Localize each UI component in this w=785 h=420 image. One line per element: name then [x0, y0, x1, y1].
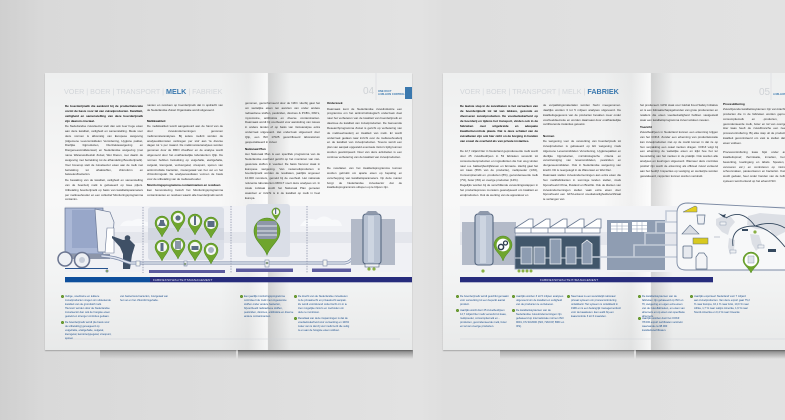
bullet: fabriek 2: Jaarlijks wordt door 25 zuivelbedrijven 12,7 miljard liter melk verwerkt tot kaas, melkpoeder, consumptiemelk en -producten, gecondenseerde melk, boter en tal van overige producten. — [460, 309, 507, 328]
text: Monitoringsprogramma: Een bemonstering betreft het Monitoringsprogramma contaminanten en residuen waarin alle boerderijmelk wordt — [147, 188, 223, 197]
text: Toezicht: Zuivelbedrijven in Nederland kunnen een erkenning krijgen van het COKZ. Zonder een erkenning van productielocatie kan zuivelproducten niet op de markt komen in dat ze op hun verpakking een ovaal merken dragen. COKZ volgt bij een erkenning de wettelijke eisen en kijkt hoe het ter beoordeling van het merken in de praktijk. Ook worden alle analyses en keuringen uitgevoerd. Wanneer deze controles positief zijn wordt de erkenning als officieel zuivel verleend aan het bedrijf. Inspecties op vestiging en werkwijze worden geëvalueerd, rapporten kunnen worden verstrekt. — [640, 130, 718, 178]
header marks: rules and blue tab — [376, 73, 771, 100]
text: column three top: genomen, geconformeerd door de NZO. Hierbij gaat het om wettelijke eisen ten aanzien van onder andere radioactieve stoffen, pesticiden, dioxines & PCB's, PAK's, mycotoxine, antibiotica en diverse contaminanten. Daarnaast wordt bij voorbeeld voor aansluiting van issues in andere landen of op basis van risicoanalyse extra onderzoek uitgevoerd. Het onderzoek uitgevoerd door Qlip, een ISO 17025 gecertificeerd laboratorium gespecialiseerd in zuivel. — [245, 101, 320, 144]
icon pins: lab tests row two — [155, 238, 218, 264]
bullet: fabriek 1: De boerderijmelk wordt geschikt gemaakt voor verwerking tot een beperkt aantal product. — [460, 295, 508, 306]
world map with export routes — [714, 213, 785, 255]
bullet: voer left 2: De boerderijmelk wordt (de basis voor de uitbetaling) gereageerd op vetgehalte, eiwitgehalte, celgetal, kiemgetal, kerosinetypegetal, vriespunt, sporen — [65, 321, 111, 340]
heading: Nationaal Plan: Nationaal Plan — [245, 147, 266, 151]
bullet: melk 4: De kracht van de Nederlandse zuivelketen is de privaatrecht en privaatrecht aanpak. Ze wordt voortdurend onderzocht om in te zien mogelijke risico's en methoden om deze te monitoren. — [298, 295, 348, 314]
page number 04: 04 — [363, 86, 374, 97]
text: intro lead right brochure: De laatste stap in de zuivelketen is het verwerken van de boerderijmelk tot tal van lekkere, gezonde en diverseren zuivelproducten. De voedselzekerheid op de boerderij en tijdens het transport, vinden ook in de fabrieken over uitgebreide en adequate kwaliteitscontrole plaats. Dat is deze schakel van de zuivelketen zijn ook hier zicht on de borging in handen van zowel de overheid als van private instanties. — [460, 104, 538, 143]
heading: Melkkwaliteit: Melkkwaliteit — [147, 118, 166, 122]
heading: Onderzoek: Onderzoek — [327, 101, 343, 105]
bullet: fabriek 8: Jaarlijks exporteert Nederland voor 7 miljard aan zuivelproducten. Van deze export gaat 75,2 % naar Europa, 16,1 % naar Azië, 10,0 % naar Afrika, 1,7 % naar Latijns Amerika, 1,9 % naar Noord-Amerika en 0,4 % naar Oceanië. — [694, 295, 750, 314]
band: kwaliteitsmanagement bar right — [460, 277, 713, 282]
tag line page 04: ONE DUCT — [378, 90, 392, 93]
bullet: fabriek 6: De kwaliteitssystemen van de fabrieken zijn gebaseerd op ISO en HI, wetgeving en eigen extra eisen van de zuivelfabrieken, en eisen van afnemers en op eisen van specifieke afnemers. — [642, 295, 685, 318]
panel: lab analyses — [148, 207, 224, 264]
bullet: melk 3: Een jaarlijk monitoringsprogramma controleert de melk met ongewenste stoffen onder andere bacteriën, bijvoorbeeld radioactieve stoffen, pesticiden, dioxines, antibiotica en diverse andere contaminanten. — [244, 295, 293, 318]
pipes to products — [592, 211, 680, 257]
fold shading right brochure — [603, 73, 673, 350]
text: Normen: De wetgeving voor de verwerking van boerderijmelk tot zuivelproducten is gebaseerd op EU wetgeving zoals Algemene Levensmiddelen Verordening, Hygiënepakket en dierlijke bijproducten, microbiologische criteria en verontreiniging van levensmiddelen, pesticiden en diergeneesmiddelen. Ook in Nederlandse wetgeving van kracht. Dit is neergelegd in de Warenwet en Wet Dier. — [543, 139, 621, 172]
heading: Monitoringsprogramma: Monitoringsprogramma contaminanten en residuen — [147, 183, 221, 187]
icon: certificate pin — [743, 252, 759, 273]
heading: Toezicht: Toezicht — [640, 125, 652, 129]
panel: left brochure spread — [45, 73, 412, 350]
heading: Normen: Normen — [543, 134, 554, 138]
connector nodes on pipe — [106, 260, 327, 272]
text: column three right brochure: het produceert. GFSI staat voor Global Food Safety Initiative en is een lidmaatschapsgebonden van grote producenten en retailers die eisen voedselveiligheid hebben vastgesteld waar een kwaliteitsprogramma zuivel voldoen moeten. — [640, 103, 718, 122]
pipeline left brochure — [102, 256, 353, 263]
text: Onderzoek: Daarnaast kent de Nederlandse zuivelindustrie een programma om het antimicrobiologisch onderzoek doet naar het verbeteren van de kwaliteit van boerderijmelk en daarmee de kwaliteit van zuivelproducten. De Genoemde Researchprogramma Zuivel is gericht op verbetering van de melkveehouderij en kwaliteit van melk. Er wordt onderzoek gedaan naar inzicht over de melkveehouderij en de kwaliteit van zuivelproducten. Tevens wordt een plan van aanpak opgesteld eventuele risico's tijdig kunnen worden geanticipeerd. Doel van deze activiteiten is een continue verbetering van de kwaliteit van zuivelproducten. — [327, 106, 402, 159]
bullet: fabriek 5: Naar kaas is een wereldwijd nationaal privaat systeem om procescontrolering ontwikkeld. Het systeem is ontwikkeld in 1996 en is een belangrijk managementtool voor de kaasketen. Een audit bij een kaascontrole 3 tot 6 maanden. — [571, 295, 621, 318]
bullet: fabriek 3: Jaarlijks worden 3 tot 5 miljoen analyses uitgevoerd om de kwaliteit en veiligheid van de producten te verzekeren. — [516, 295, 563, 306]
frame: products and world export — [677, 203, 785, 270]
icon: butter pack — [693, 238, 708, 244]
page number 05: 05 — [759, 87, 770, 98]
left diagram sky band — [65, 206, 412, 272]
icon: gear pin — [494, 236, 512, 261]
icon: can — [683, 246, 692, 258]
text: Onderzoek conclusion: De resultaten van het kwaliteitsprogramma kunnen worden gebruikt om aparte eisen op bepaling en verschepping van kwaliteitsparameters. Op deze manier borgt de Nederlandse zuivelsector dat de kwaliteitsprogramma's uitlopen op te blijven zijn. — [327, 166, 402, 189]
silo left brochure — [351, 211, 395, 271]
warehouse building — [607, 220, 665, 270]
bullet: voer left 1: Veilige, voedzame en lekkere zuivelproducten vragen om uitstekende kwaliteit van de grondstof melk. Hiervoor worden door de Nederlandse zuivelsector dan ook de hoogste eisen gesteld en strenger controles gedaan. — [65, 295, 111, 318]
heading: right brochure breadcrumb: VOER | BOER | TRANSPORT | MELK | FABRIEK — [460, 87, 619, 96]
heading: left brochure breadcrumb: VOER | BOER | TRANSPORT | MELK | FABRIEK — [64, 87, 222, 96]
text: column two right brochure: de verpakkingsmaterialen worden hierin meegenomen. Jaarlijks worden 3 tot 5 miljoen analyses uitgevoerd. De kwaliteitsgegevens van de producten bevatten meer onder voorbeeldsecretie en worden daarnaast door onafhankelijke certificerende instanties getoetst. — [543, 103, 621, 126]
band: kwaliteitsmanagement bar right: FABRIEKSKWALITEIT/MANAGEMENT — [540, 278, 598, 282]
text: paragraph monitoring: De bewaking van de kwaliteit, veiligheid en samenstelling van de boerderij melk is gebaseerd op twee pijlers. Uitbetaling boerderijmelk op basis van kwaliteitsparameters per melkveehouder en een collectief Monitoringsprogramma contamin- — [65, 178, 143, 201]
shadow under left brochure, left page — [100, 350, 236, 359]
panel: right brochure spread — [443, 73, 785, 350]
bullet: melk 5: Resultaat van deze inspanningen is dat de voedselzekerheid voor verwerking en 100% zeker van is dat zij voor melk bezit die veilig is en aan de hoogste eisen voldoet. — [298, 317, 349, 332]
tag line page 04 — [378, 90, 406, 96]
icon: cheese — [683, 206, 697, 212]
right diagram sky band — [460, 206, 785, 272]
fold shading left brochure — [220, 73, 290, 350]
tag line page 04: A MILLION CONTROLS — [378, 93, 406, 96]
bullet: fabriek 7: Jaarlijks worden door het COKZ 78.000 export certificaten verstrekt waarvande ca 38.000 kwaliteitscertificaten. — [642, 317, 683, 332]
shadow under right brochure, left page — [500, 350, 634, 359]
shadow under right brochure, right page — [636, 350, 785, 359]
bullet: voer left column two: van bacteriouw bacteriën, zoutgetaal van het vet en het chloroformgehalte. — [120, 295, 168, 302]
icon: powder pile — [682, 225, 699, 234]
icon: milk tanker truck — [58, 208, 114, 269]
band: kwaliteitsmanagement bar left: FABRIEKSKWALITEITSMANAGEMENT — [153, 278, 212, 282]
purple phase bars left — [149, 268, 351, 273]
icon: factory with solar roofs — [515, 219, 607, 272]
silo and buildings right brochure — [462, 211, 516, 273]
icon pins: lab tests row one — [155, 211, 218, 238]
text: Melkkwaliteit: De melkkwaliteit wordt aangestuurd aan de hand van de door zuivelondernemingen genomen melkmonsteranalyses. Bij iedere melkrit worden de analyseuitkomsten verkregen per stof aan 'la diverse dagen tot 's per maand. De melkmonsteranalyses worden genomen door de RMO chauffeur en de analyse wordt uitgevoerd door het onafhankelijke laboratorium Qlip. De normen hebben betrekking op vetgehalte, eiwitgehalte, celgetal, kiemgetal, vetzuurgetal, vriespunt, sporen van antimicrobiële bacteriën, zoutergetaal van het vet en het chloroformgetal. De analyseresultaten vormen de basis voor de uitbetaling van de melkveehouder. — [147, 124, 223, 181]
heading: Proceskiltering: Proceskiltering — [723, 102, 745, 106]
text: paragraph quality: De Nederlandse zuivelsector stelt dan ook zeer hoge eisen aan deze kwaliteit, veiligheid en samenstelling. Mede voor deze normen is afkomstig van Europese wetgeving (Algemene Levensmiddelen Verordening, Hygiëne pakket, Dierlijke bijproducten, Dierziektewetgeving en Diergeneesmiddelenwet) en Nederlandse wetgeving (met name Warenwetbesluit Zuivel, Wet Dieren, met daarin de wetgeving met betrekking tot de afhandeling Boerderijmelk). Voor bovenop stelt de zuivelsector eisen aan de melk met betrekking tot afvalstoffen, chloroform en bekoelen/bacteriën. — [65, 124, 143, 176]
factory equipment — [521, 239, 592, 264]
page rules — [65, 338, 785, 340]
bullet: fabriek 4: De kwaliteitssystemen van de Nederlandse zuivelondernemingen zijn gebaseerd op internationale normen ISO 9001, FS SC2000 (ISO, HACCP, BRC en IFS). — [516, 309, 564, 328]
text: intro lead left brochure: De boerderijmelk die aankomt bij de productielocatie vormt de basis voor tal van zuivelproducten. Kwaliteit, veiligheid en samenstelling van deze boerderijmelk zijn daarom cruciaal. — [65, 104, 143, 123]
shadow under left brochure, right page — [238, 350, 413, 359]
text: column two top: nanten en residuen op boerderijmelk dat in opdracht van de Nederlandse Zuivel Organisatie wordt uitgevoerd. — [147, 103, 223, 112]
text: paragraph process: Dagelijks worden bij de verschillende verwerkingsstappen in het productieproces monsters geanalyseerd om kwaliteit en eindproducten. Ook de werking van de apparatuur en — [460, 183, 538, 197]
dashed dividers — [143, 206, 307, 273]
text: Nationaal Plan: Het Nationaal Plan is een specifiek programma van de Nederlandse overheid gericht op het monitoren van niet-gewenste stoffen in voedsel. De basis hiervoor staat in Europese wetgeving. Van rauwmelkproducten in boerderijmelk worden de resultaten, jaarlijks ongeveer 10.000 monsters, gemeld bij de overheid. Het nationale referentie laboratorium RIKILT voert deze analyses uit. In totale Lidstaat wordt het Nationaal Plan gemeten waardoor er inzicht is in de kwaliteit op melk in heel Europa. — [245, 152, 320, 200]
icon: milk carton — [696, 253, 707, 269]
band: kwaliteitsmanagement bar left — [65, 277, 412, 282]
text: paragraph factories: De 12,7 miljard liter in Nederland geproduceerde melk wordt door 25 zuivelbedrijven in 53 fabrieken verwerkt tot consumentenproducten en ingrediënten die hun weg vinden naar o.a. bakkerijbedrijfsleven en farmacie. Hierbij gaat het om kaas (55% van de productie), melkpoeder (14%), Consumptiemelk en -producten (8%), gecondenseerde melk (7%), boter (3%) en overige producten (14%). — [460, 149, 538, 182]
text: Normen continuation: Daarnaast stellen zuivelondernemingen aan extra eisen die hun melkfabrikanten in sommige landen stellen, zoals bijvoorbeeld China, Rusland en Brazilië. Ook de klanten van zuivelondernemingen stellen vaak extra eisen door bijvoorbeeld een GFSI-erkend voedselveiligheidscertificaat te verlangen van — [543, 173, 621, 201]
panel: dairy factory pin — [246, 204, 290, 257]
icon: cup — [697, 215, 705, 224]
icon: person silhouette — [112, 235, 135, 269]
